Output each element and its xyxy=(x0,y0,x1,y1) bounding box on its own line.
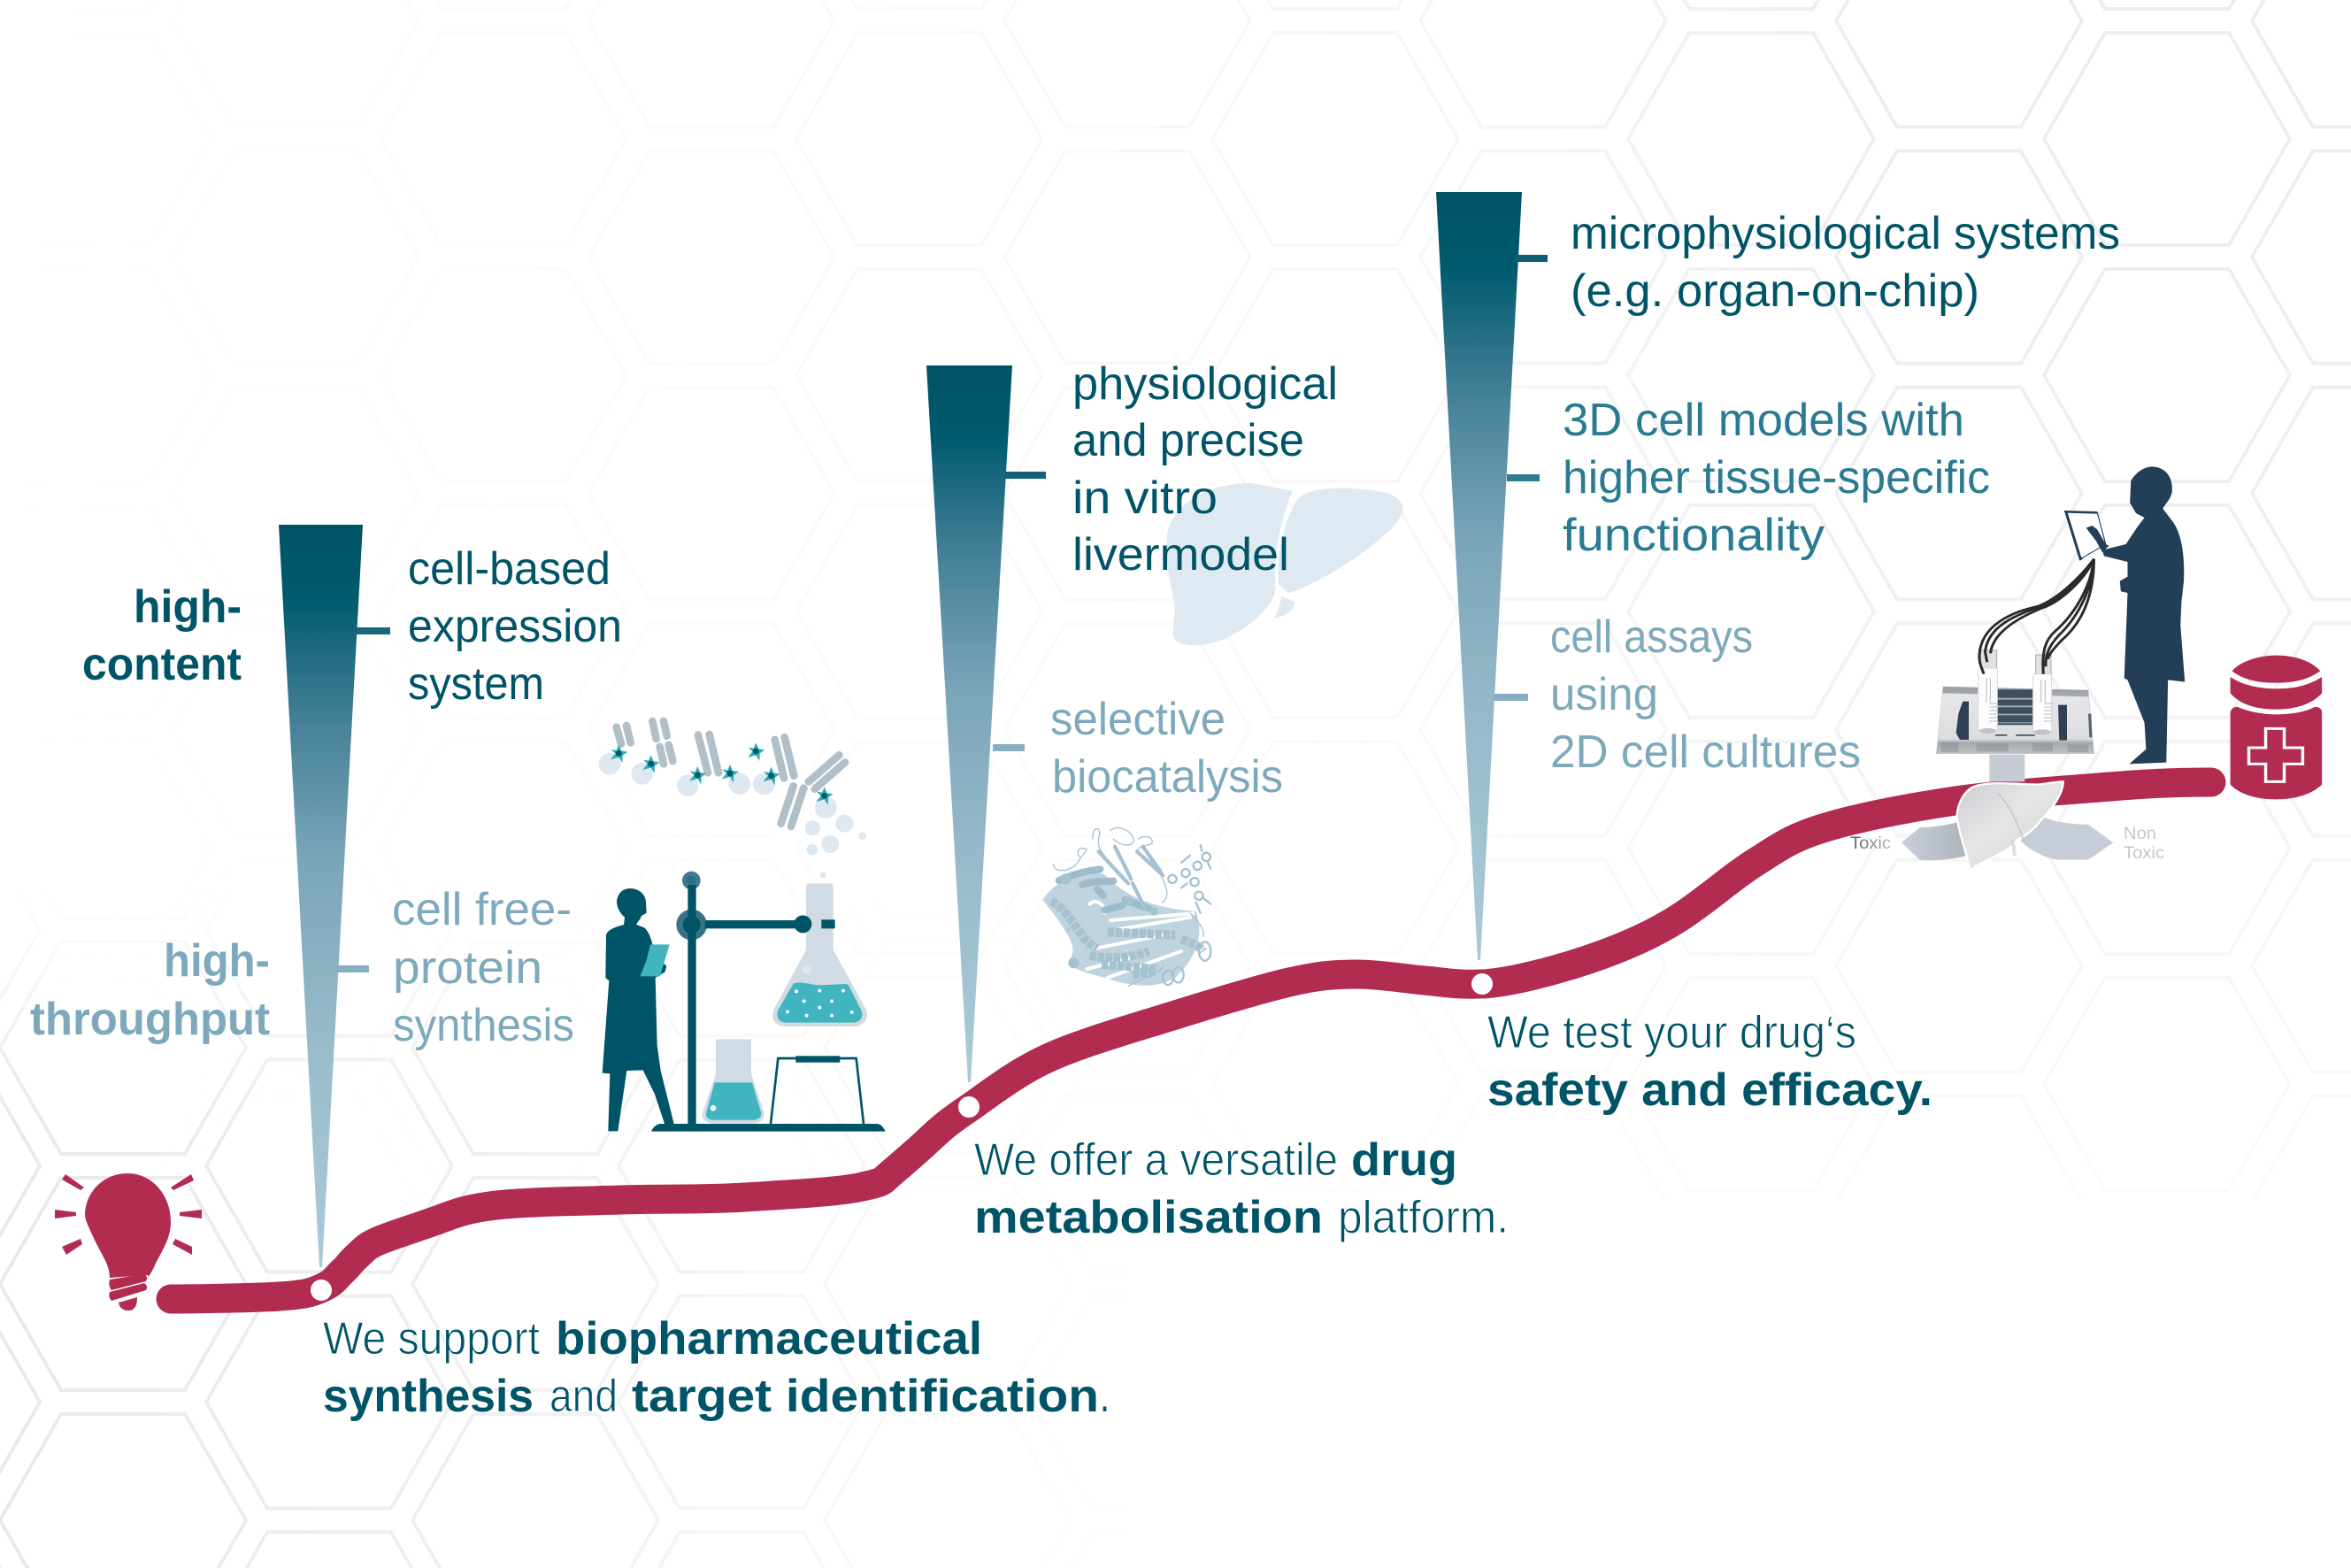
axis label: high-throughput: high- xyxy=(164,935,270,987)
illustration: antibodies and bubbles xyxy=(599,721,866,878)
illustration: pale liver behind text xyxy=(1166,483,1402,645)
caption: drug metabolisation platform: We offer a versatile xyxy=(974,1134,1338,1186)
caption: safety and efficacy xyxy=(1487,1007,1932,1116)
microfluidic tubing xyxy=(1979,559,2094,674)
illustration: scientist with lab stand and flasks xyxy=(603,872,886,1132)
text: cell free-protein synthesis: cell free- xyxy=(392,884,572,935)
text: microphysiological systems: microphysiological systems xyxy=(1571,208,2120,259)
caption: biopharmaceutical synthesis xyxy=(323,1313,1110,1422)
text: cell free-protein synthesis: synthesis xyxy=(393,1000,574,1051)
text: cell free-protein synthesis xyxy=(392,884,574,1051)
axis label: high-content xyxy=(82,581,242,690)
illustration: organ-on-chip device xyxy=(1936,650,2094,754)
hand xyxy=(2086,526,2109,552)
text: cell assays: using xyxy=(1550,669,1658,720)
text: physiological and precise in vitro livermodel: in vitro xyxy=(1072,473,1218,524)
small flask liquid xyxy=(706,1082,761,1120)
caption: safety and efficacy: We test your drug‘s xyxy=(1487,1007,1856,1058)
liquid bubbles xyxy=(786,965,854,1018)
illustration: scientist with tablet xyxy=(2066,466,2185,764)
lab stand xyxy=(651,872,886,1132)
text: physiological and precise in vitro livermodel: and precise xyxy=(1072,415,1304,466)
text: physiological and precise in vitro livermodel: livermodel xyxy=(1072,529,1289,580)
text: 3D cell models: higher tissue-specific xyxy=(1563,452,1990,503)
scientist silhouette xyxy=(603,888,674,1131)
text: cell assays: cell assays xyxy=(1550,611,1753,663)
large flask liquid xyxy=(777,983,862,1023)
axis label: high-throughput: throughput xyxy=(30,994,270,1045)
label: Non Toxic xyxy=(2124,825,2164,863)
gradient cone 3 with ticks xyxy=(1436,192,1548,960)
icon: medicine bottle xyxy=(2231,656,2322,799)
caption: drug metabolisation platform: drug xyxy=(1351,1134,1457,1186)
text: cell free-protein synthesis: protein xyxy=(393,942,542,994)
text: cell assays: 2D cell cultures xyxy=(1550,726,1861,778)
caption: biopharmaceutical synthesis: . xyxy=(1100,1371,1110,1422)
toxicity arrows xyxy=(1902,817,2113,860)
caption: safety and efficacy: safety and efficacy. xyxy=(1487,1065,1932,1116)
axis label: high-content: high- xyxy=(134,581,242,633)
text: physiological and precise in vitro livermodel xyxy=(1072,358,1338,580)
text: cell-based expression system: system xyxy=(408,658,544,710)
text: cell-based expression system: cell-based xyxy=(408,543,611,595)
text: selective biocatalysis: selective xyxy=(1050,694,1225,745)
gradient cone 1 with ticks xyxy=(279,525,390,1267)
clipboard xyxy=(640,944,670,976)
caption: biopharmaceutical synthesis: biopharmaceutical xyxy=(556,1313,982,1364)
caption: biopharmaceutical synthesis: and xyxy=(549,1371,618,1422)
axis label: high-throughput xyxy=(30,935,270,1045)
text: physiological and precise in vitro livermodel: physiological xyxy=(1072,358,1338,410)
illustration: enzyme protein structure xyxy=(1042,828,1210,987)
text: cell-based expression system: expression xyxy=(408,601,622,652)
text: selective biocatalysis xyxy=(1050,694,1283,803)
tablet xyxy=(2066,511,2106,559)
small flask xyxy=(703,1039,764,1123)
text: 3D cell models xyxy=(1563,395,1990,561)
label: Toxic: Toxic xyxy=(1850,834,1891,853)
text: 3D cell models: functionality xyxy=(1563,510,1825,561)
caption: drug metabolisation platform xyxy=(974,1134,1509,1243)
text: microphysiological systems xyxy=(1571,208,2120,317)
text: 3D cell models: 3D cell models with xyxy=(1563,395,1964,446)
rising development road xyxy=(171,782,2211,1299)
text: microphysiological systems: (e.g. organ-on-chip) xyxy=(1571,265,1979,317)
scientist silhouette xyxy=(2102,466,2185,764)
liver xyxy=(1957,781,2063,870)
icon: light bulb xyxy=(55,1173,202,1311)
text: selective biocatalysis: biocatalysis xyxy=(1052,751,1283,803)
caption: biopharmaceutical synthesis: target identification xyxy=(632,1371,1099,1422)
caption: drug metabolisation platform: metabolisation xyxy=(974,1192,1323,1243)
text: cell assays xyxy=(1550,611,1861,778)
label: Non Toxic: Non xyxy=(2124,825,2156,843)
large flask xyxy=(772,883,867,1026)
caption: drug metabolisation platform: platform. xyxy=(1338,1192,1509,1243)
caption: biopharmaceutical synthesis: synthesis xyxy=(323,1371,534,1422)
label: Non Toxic: Toxic xyxy=(2124,844,2164,863)
text: cell-based expression system xyxy=(408,543,622,710)
axis label: high-content: content xyxy=(82,639,242,690)
chip stem and liver xyxy=(1957,755,2063,870)
caption: biopharmaceutical synthesis: We support xyxy=(323,1313,541,1364)
gradient cone 2 with ticks xyxy=(926,365,1046,1082)
milestone dots on road xyxy=(311,973,1493,1301)
